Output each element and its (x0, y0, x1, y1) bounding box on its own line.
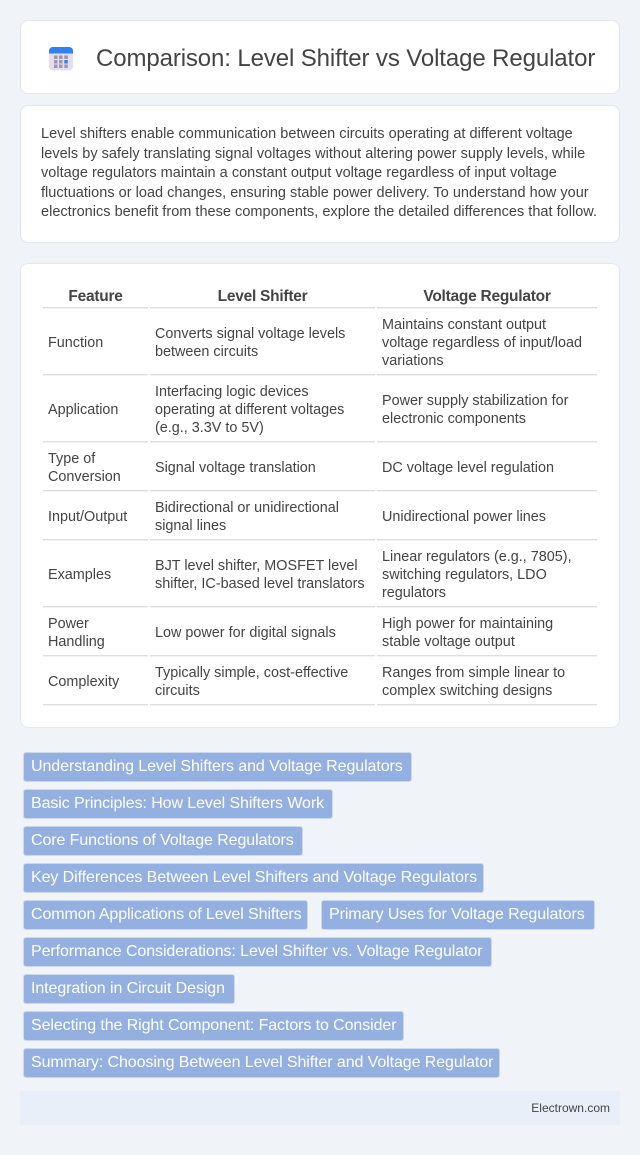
tag: Common Applications (23, 900, 308, 930)
intro text: levels by safely translating signal voltages without altering power supply levels, while (41, 146, 585, 162)
intro text: voltage regulators maintain a constant output voltage regardless of input voltage (41, 165, 557, 181)
tag: Understanding (23, 752, 412, 782)
row: Function: between circuits (155, 344, 258, 360)
tag: Key Differences: Key Differences Between Level Shifters and Voltage Regulators (31, 869, 477, 886)
row: Input/Output: Input/Output (48, 509, 127, 525)
footer credit: Electrown.com (531, 1101, 610, 1115)
row: Complexity: complex switching designs (382, 683, 552, 699)
row: Examples: Examples (48, 567, 111, 583)
tag: Summary: Summary: Choosing Between Level Shifter and Voltage Regulator (31, 1054, 493, 1071)
row: Function: Converts signal voltage levels (155, 326, 345, 342)
intro text: fluctuations or load changes, ensuring stable power delivery. To understand how your (41, 185, 589, 201)
row: Complexity: Typically simple, cost-effective (155, 665, 348, 681)
tag: Performance (23, 937, 492, 967)
row: Complexity: Complexity (48, 674, 119, 690)
tag: Primary Uses: Primary Uses for Voltage Regulators (329, 906, 585, 923)
tag: Basic Principles: Basic Principles: How Level Shifters Work (31, 795, 324, 812)
row: Examples: BJT level shifter, MOSFET level (155, 558, 358, 574)
row: Function: voltage regardless of input/load (382, 335, 582, 351)
tag: Basic Principles (23, 789, 333, 819)
row: Application: (e.g., 3.3V to 5V) (155, 420, 264, 436)
row: Complexity: circuits (155, 683, 200, 699)
row: Type of Conversion: Type of (48, 451, 95, 467)
tag: Primary Uses (321, 900, 595, 930)
row: Input/Output: Bidirectional or unidirectional (155, 500, 339, 516)
intro text (41, 126, 597, 220)
row: Function (48, 317, 582, 369)
row: Examples (48, 549, 572, 601)
icon: calendar grid (49, 47, 73, 70)
row: Input/Output: Unidirectional power lines (382, 509, 546, 525)
row: Application: Power supply stabilization for (382, 393, 568, 409)
row: Power Handling: Power (48, 616, 89, 632)
comparison table card (20, 263, 620, 728)
intro text: Level shifters enable communication between circuits operating at different voltage (41, 126, 573, 142)
row: Application: Application (48, 402, 118, 418)
header card (20, 20, 620, 94)
tag: Common Applications: Common Applications of Level Shifters (31, 906, 302, 923)
tag: Summary (23, 1048, 500, 1078)
tag: Selecting: Selecting the Right Component: Factors to Consider (31, 1017, 396, 1034)
tag: Performance: Performance Considerations: Level Shifter vs. Voltage Regulator (31, 943, 482, 960)
row: Examples: shifter, IC-based level translators (155, 576, 365, 592)
row: Power Handling: Handling (48, 634, 105, 650)
row: Type of Conversion: DC voltage level regulation (382, 460, 554, 476)
tag: Core Functions: Core Functions of Voltage Regulators (31, 832, 294, 849)
row: Application: Interfacing logic devices (155, 384, 309, 400)
tag: Core Functions (23, 826, 303, 856)
row: Function: Function (48, 335, 103, 351)
row: Power Handling: High power for maintaining (382, 616, 553, 632)
table header (68, 288, 551, 305)
tag: Key Differences (23, 863, 484, 893)
table header: Voltage Regulator (423, 288, 551, 305)
row: Type of Conversion (48, 451, 554, 485)
row: Type of Conversion: Signal voltage translation (155, 460, 316, 476)
row: Power Handling: stable voltage output (382, 634, 515, 650)
table header: Level Shifter (218, 288, 307, 305)
row: Examples: Linear regulators (e.g., 7805), (382, 549, 572, 565)
title: Comparison: Level Shifter vs Voltage Regulator (96, 45, 595, 72)
row: Application: electronic components (382, 411, 526, 427)
row: Application: operating at different voltages (155, 402, 344, 418)
row: Input/Output: signal lines (155, 518, 226, 534)
row: Power Handling: Low power for digital signals (155, 625, 336, 641)
intro card (20, 105, 620, 243)
row: Complexity: Ranges from simple linear to (382, 665, 565, 681)
row: Type of Conversion: Conversion (48, 469, 121, 485)
tag: Selecting (23, 1011, 404, 1041)
row: Function: variations (382, 353, 444, 369)
row: Examples: switching regulators, LDO (382, 567, 547, 583)
row: Function: Maintains constant output (382, 317, 546, 333)
row: Complexity (48, 665, 565, 699)
tag: Integration: Integration in Circuit Design (31, 980, 225, 997)
tag: Understanding: Understanding Level Shifters and Voltage Regulators (31, 758, 403, 775)
tag: Integration (23, 974, 235, 1004)
row: Application (48, 384, 568, 436)
row: Power Handling (48, 616, 553, 650)
table header: Feature (68, 288, 123, 305)
row: Examples: regulators (382, 585, 446, 601)
row: Input/Output (48, 500, 546, 534)
footer (20, 1091, 620, 1125)
intro text: electronics benefit from these components, explore the detailed differences that follow. (41, 204, 597, 220)
